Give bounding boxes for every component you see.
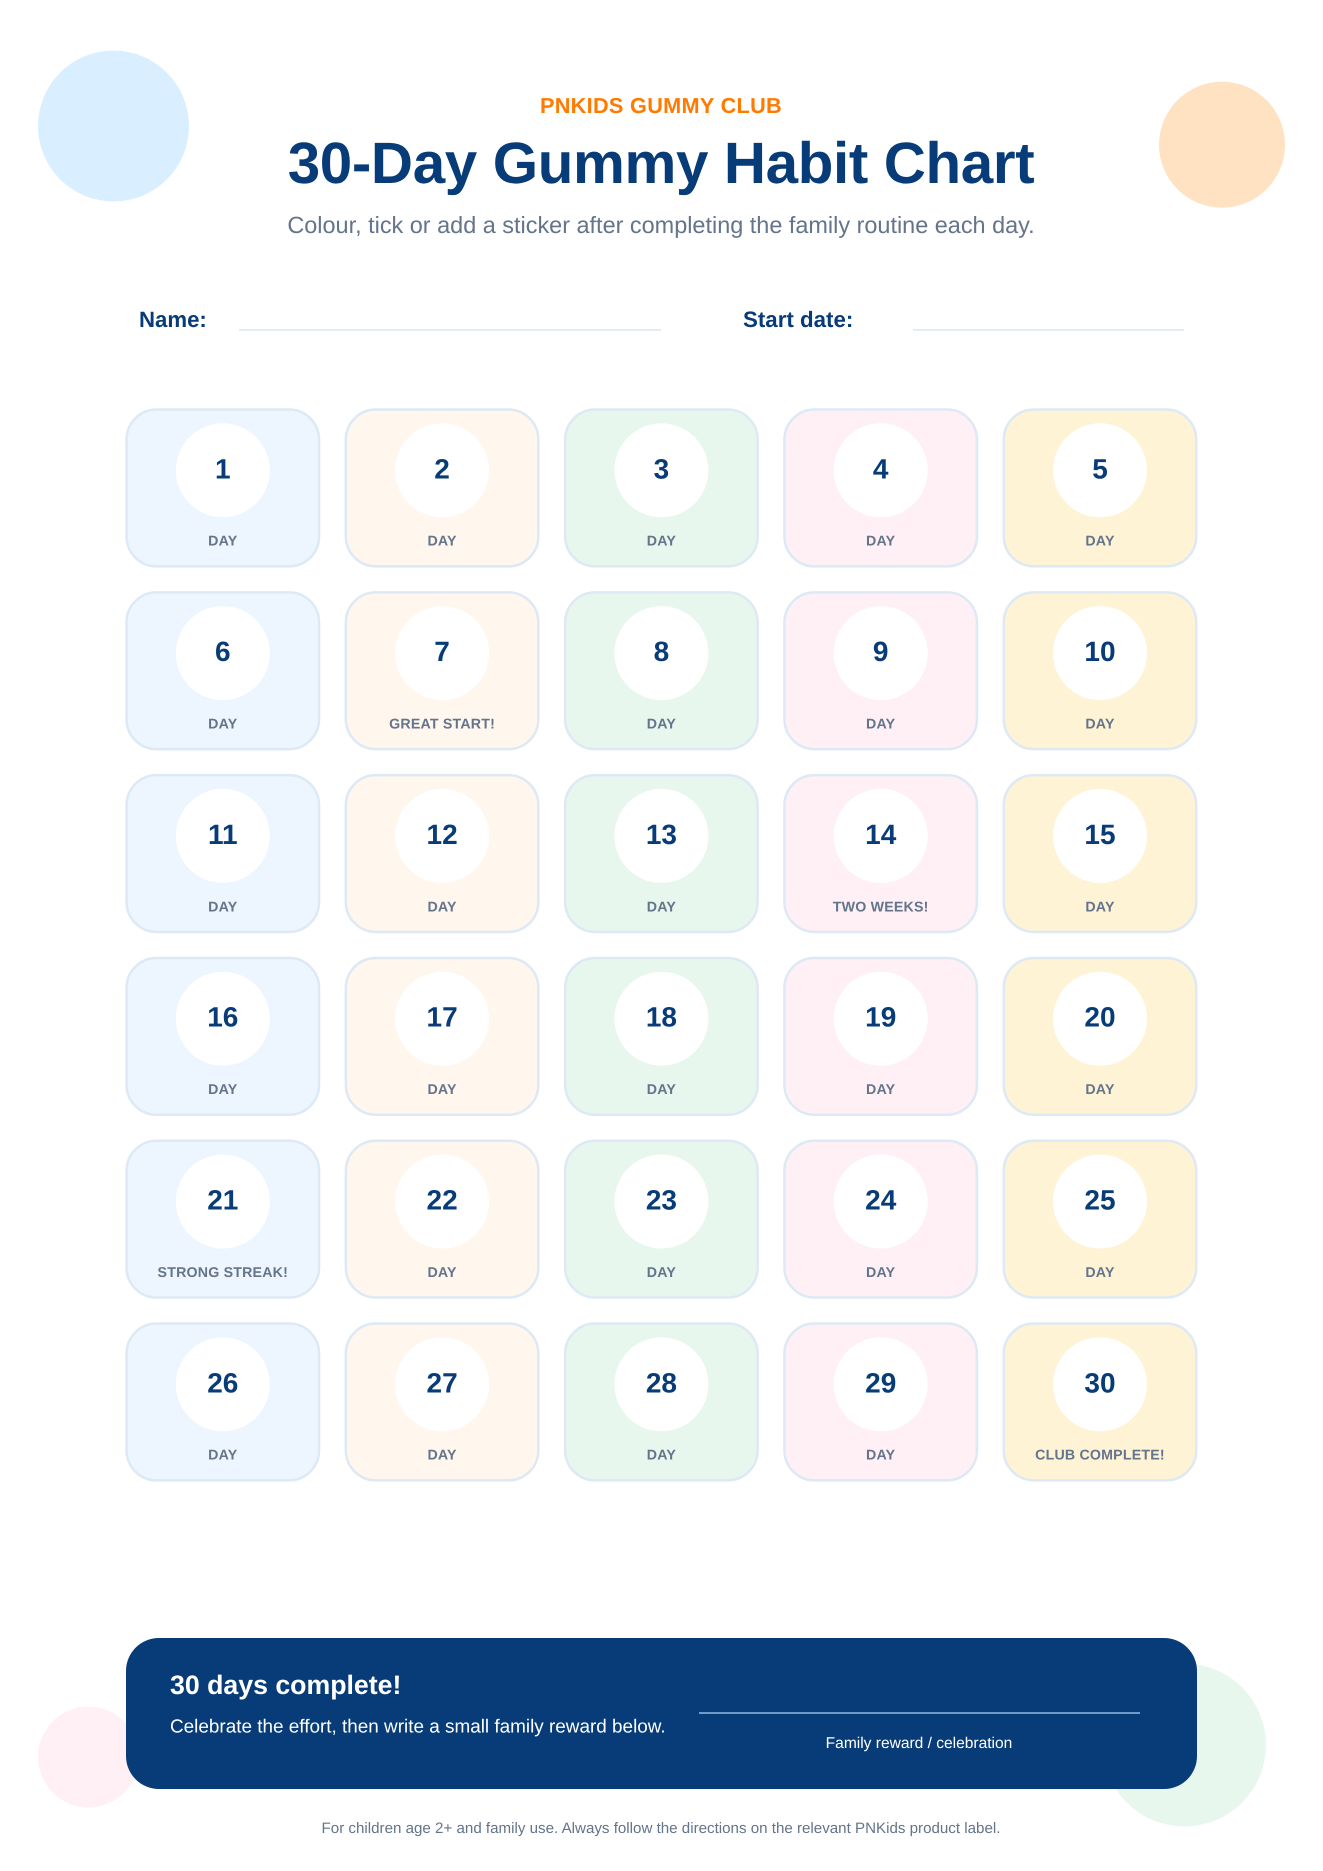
day 10 card xyxy=(1004,592,1196,749)
day 17 card: DAY xyxy=(427,1082,457,1098)
day 3 card: DAY xyxy=(647,534,676,550)
day 25 card: DAY xyxy=(1085,1265,1115,1281)
start date field: Start date: xyxy=(743,307,853,332)
subtitle: Colour, tick or add a sticker after completing the family routine each day. xyxy=(287,212,1035,238)
day 16 card: 16 xyxy=(207,1002,238,1033)
day 13 card xyxy=(565,775,758,932)
habit grid xyxy=(127,410,1196,1480)
day 19 card: DAY xyxy=(866,1082,896,1098)
day 8 card: 8 xyxy=(654,636,669,667)
day 29 card: 29 xyxy=(865,1367,896,1398)
name field: Name: xyxy=(139,307,207,332)
day 5 card xyxy=(1004,410,1196,566)
day 7 card: 7 xyxy=(434,636,450,667)
day 29 card xyxy=(784,1324,977,1480)
day 7 card: GREAT START! xyxy=(389,716,495,732)
day 9 card xyxy=(784,592,977,749)
title: 30-Day Gummy Habit Chart xyxy=(288,131,1034,196)
day 28 card: DAY xyxy=(647,1448,676,1464)
eyebrow: brand name: PNKIDS GUMMY CLUB xyxy=(540,93,782,118)
day 11 card: 11 xyxy=(208,819,238,850)
day 18 card xyxy=(565,958,758,1115)
day 9 card: DAY xyxy=(866,716,896,732)
day 25 card: 25 xyxy=(1084,1184,1116,1216)
day 12 card: 12 xyxy=(427,819,458,850)
day 21 card xyxy=(127,1141,319,1298)
day 19 card xyxy=(784,958,977,1115)
day 9 card: 9 xyxy=(873,636,888,667)
day 1 card xyxy=(127,410,319,566)
day 6 card xyxy=(127,592,319,749)
day 19 card: 19 xyxy=(865,1002,896,1033)
day 20 card xyxy=(1004,958,1196,1115)
day 10 card: DAY xyxy=(1085,716,1115,732)
day 4 card xyxy=(784,410,977,566)
day 21 card: STRONG STREAK! xyxy=(158,1265,288,1281)
day 30 card: CLUB COMPLETE! xyxy=(1035,1448,1165,1464)
day 2 card xyxy=(346,410,538,566)
day 12 card: DAY xyxy=(427,899,457,915)
day 22 card: 22 xyxy=(427,1184,458,1216)
day 29 card: DAY xyxy=(866,1448,896,1464)
day 6 card: DAY xyxy=(208,716,238,732)
day 5 card: DAY xyxy=(1085,534,1115,550)
day 20 card: DAY xyxy=(1085,1082,1115,1098)
day 28 card xyxy=(565,1324,758,1480)
day 1 card: 1 xyxy=(215,453,231,484)
day 26 card: DAY xyxy=(208,1448,238,1464)
day 16 card xyxy=(127,958,319,1115)
decorative circle: orange top right xyxy=(1159,82,1285,208)
banner heading: 30 days complete! xyxy=(170,1670,401,1700)
day 25 card xyxy=(1004,1141,1196,1298)
decorative circle: green bottom right xyxy=(1103,1664,1266,1826)
day 15 card xyxy=(1004,775,1196,932)
day 2 card: DAY xyxy=(427,534,457,550)
day 16 card: DAY xyxy=(208,1082,238,1098)
footer note: For children age 2+ and family use. Always follow the directions on the relevant PNKids product label. xyxy=(322,1820,1000,1837)
day 27 card: 27 xyxy=(427,1367,458,1398)
day 24 card xyxy=(784,1141,977,1298)
day 30 card: 30 xyxy=(1084,1367,1116,1398)
day 14 card xyxy=(784,775,977,932)
day 3 card: 3 xyxy=(654,453,669,484)
day 5 card: 5 xyxy=(1092,453,1108,484)
banner text: Celebrate the effort, then write a small family reward below. xyxy=(170,1717,666,1738)
day 23 card: 23 xyxy=(646,1184,677,1216)
reward caption: Family reward / celebration xyxy=(826,1735,1012,1752)
day 8 card xyxy=(565,592,758,749)
day 4 card: DAY xyxy=(866,534,896,550)
day 18 card: 18 xyxy=(646,1002,677,1033)
day 12 card xyxy=(346,775,538,932)
day 26 card xyxy=(127,1324,319,1480)
day 24 card: DAY xyxy=(866,1265,896,1281)
decorative circle: pink bottom left xyxy=(38,1706,139,1808)
day 22 card: DAY xyxy=(427,1265,457,1281)
panel: completion banner xyxy=(126,1638,1197,1789)
day 13 card: DAY xyxy=(647,899,676,915)
day 14 card: TWO WEEKS! xyxy=(833,899,929,915)
day 7 card xyxy=(346,592,538,749)
day 17 card xyxy=(346,958,538,1115)
day 20 card: 20 xyxy=(1084,1002,1116,1033)
day 15 card: 15 xyxy=(1084,819,1116,850)
day 23 card xyxy=(565,1141,758,1298)
day 8 card: DAY xyxy=(647,716,676,732)
day 24 card: 24 xyxy=(865,1184,897,1216)
day 11 card: DAY xyxy=(208,899,238,915)
day 15 card: DAY xyxy=(1085,899,1115,915)
day 14 card: 14 xyxy=(865,819,897,850)
day 6 card: 6 xyxy=(215,636,231,667)
reward line xyxy=(699,1712,1140,1714)
day 1 card: DAY xyxy=(208,534,238,550)
day 27 card: DAY xyxy=(427,1448,457,1464)
day 21 card: 21 xyxy=(207,1184,238,1216)
day 26 card: 26 xyxy=(207,1367,238,1398)
day 27 card xyxy=(346,1324,538,1480)
day 22 card xyxy=(346,1141,538,1298)
day 11 card xyxy=(127,775,319,932)
day 30 card xyxy=(1004,1324,1196,1480)
day 28 card: 28 xyxy=(646,1367,677,1398)
day 4 card: 4 xyxy=(873,453,889,484)
decorative circle: blue top left xyxy=(38,50,189,202)
day 2 card: 2 xyxy=(434,453,450,484)
day 3 card xyxy=(565,410,758,566)
day 17 card: 17 xyxy=(427,1002,458,1033)
day 18 card: DAY xyxy=(647,1082,676,1098)
day 13 card: 13 xyxy=(646,819,677,850)
day 10 card: 10 xyxy=(1084,636,1116,667)
day 23 card: DAY xyxy=(647,1265,676,1281)
